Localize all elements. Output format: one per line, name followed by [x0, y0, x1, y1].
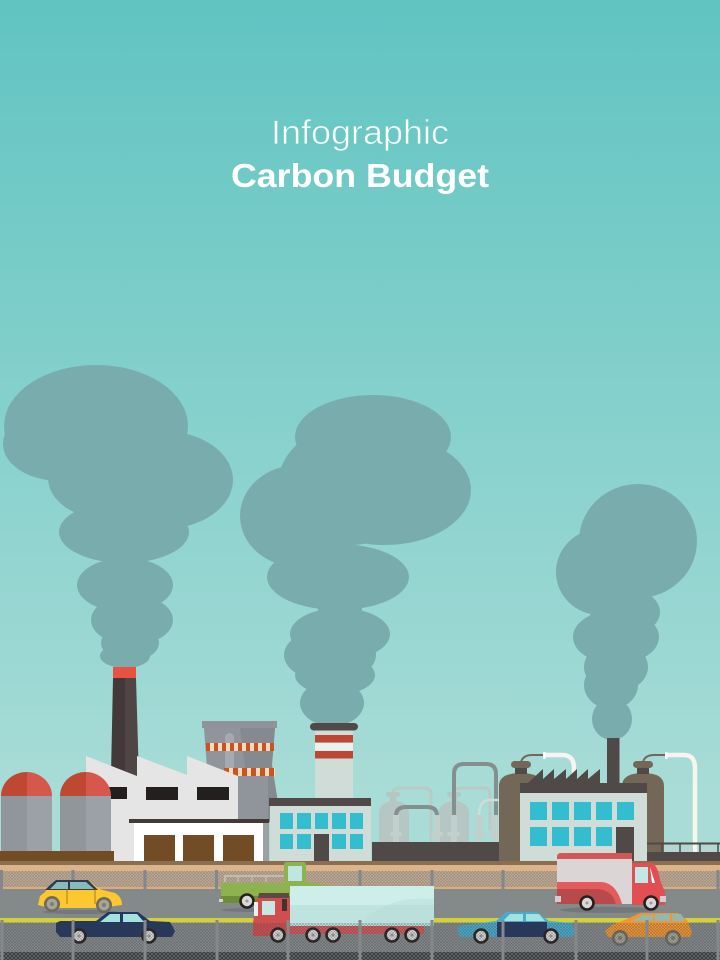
- title: [231, 114, 489, 194]
- storage silos: [0, 772, 114, 861]
- cooling tower: [202, 721, 281, 822]
- white factory with saw-tooth roof: [86, 756, 269, 861]
- striped exhaust stack: [310, 723, 358, 800]
- upper chain-link fence: [0, 870, 720, 890]
- lower chain-link fence: [0, 920, 720, 960]
- blue sedan: [458, 912, 575, 944]
- ground strip: [0, 861, 720, 872]
- red delivery van: [555, 853, 666, 913]
- yellow car: [38, 880, 122, 914]
- road: [0, 888, 720, 960]
- office building: left: [269, 798, 371, 861]
- brown tanks with white pipes: [499, 738, 695, 861]
- yellow road line: [0, 918, 720, 922]
- refinery platform: [372, 842, 520, 861]
- loading platform with railing: [647, 843, 720, 861]
- refinery tanks and pipes: pale: [379, 764, 518, 842]
- orange hatchback: [605, 913, 692, 946]
- smoke plume: centre: [240, 395, 471, 726]
- smoke plume: right: [556, 484, 697, 740]
- tall brick chimney: [111, 667, 139, 780]
- office building: right: [520, 769, 647, 861]
- navy sedan: [56, 912, 175, 944]
- title: Carbon Budget: [231, 157, 489, 194]
- smoke plume: left: [3, 365, 233, 668]
- title: Infographic: [271, 114, 449, 152]
- green pickup truck: [219, 862, 330, 912]
- box truck with trailer: [253, 886, 434, 943]
